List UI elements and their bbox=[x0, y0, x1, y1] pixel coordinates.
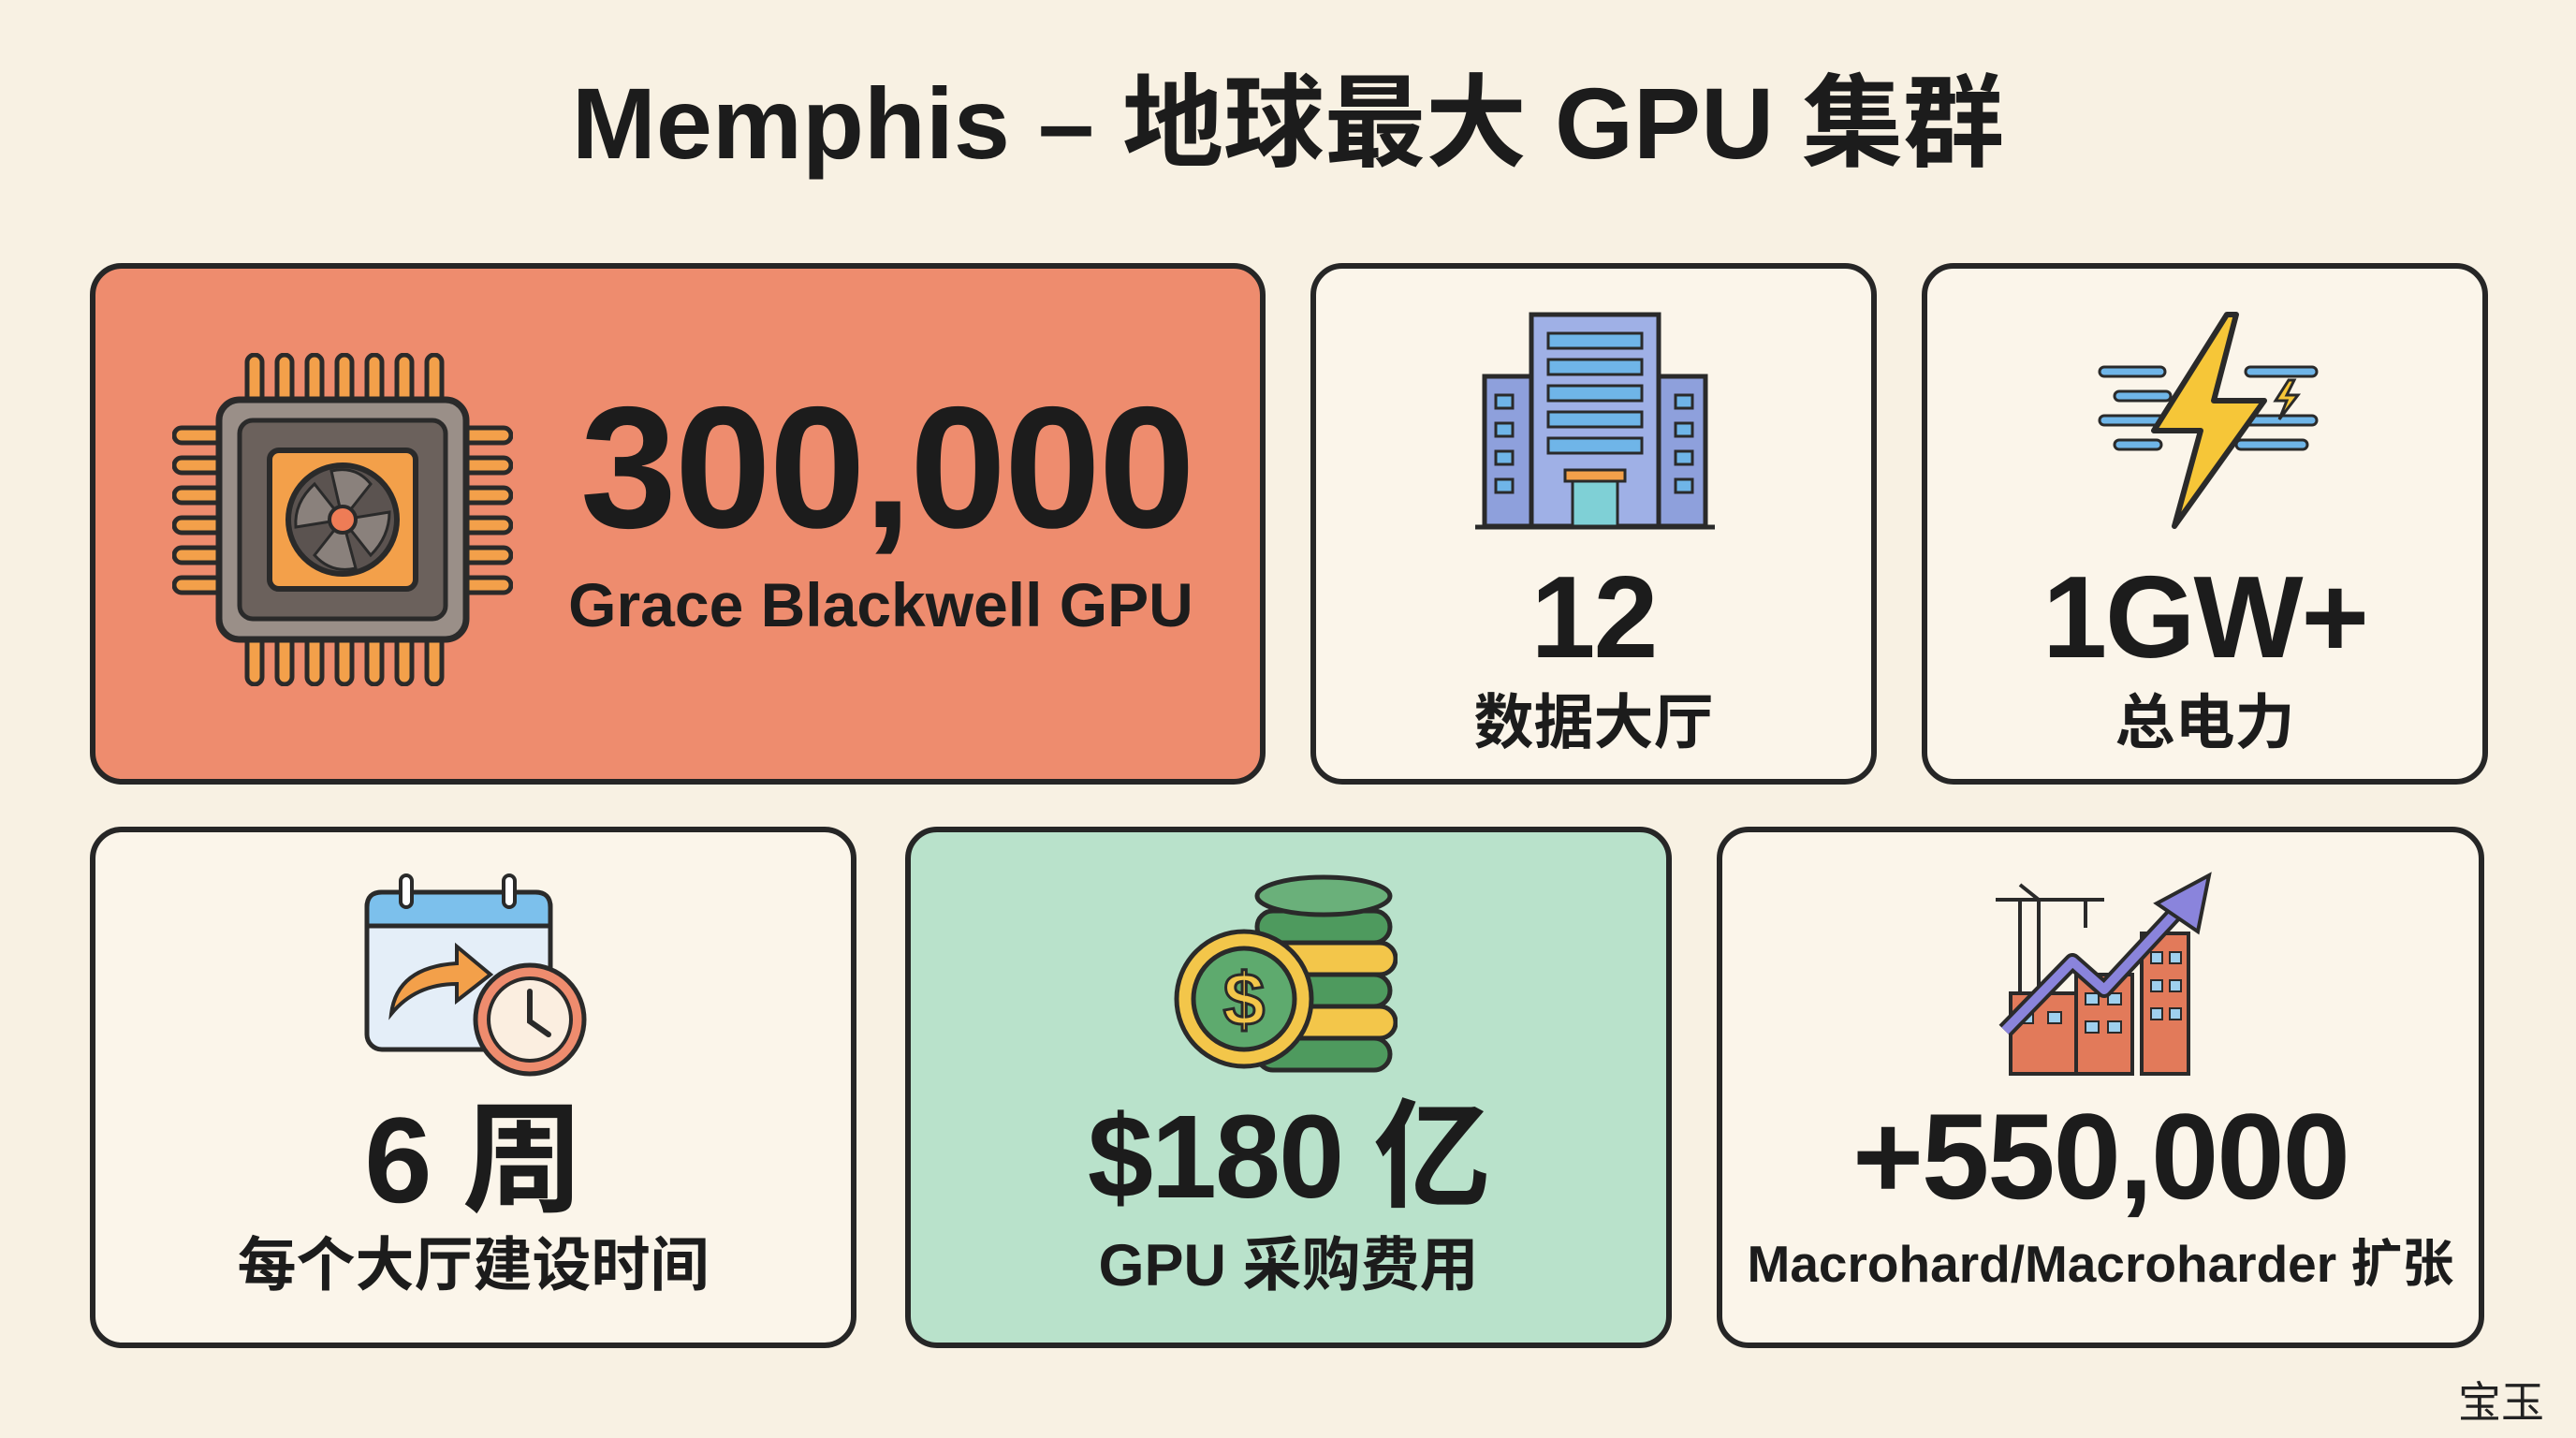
panel: build time bbox=[90, 827, 856, 1348]
icon: coins bbox=[1174, 874, 1398, 1073]
icon: coins: $ bbox=[1223, 958, 1265, 1041]
number: +550,000: +550,000 bbox=[1852, 1088, 2349, 1225]
panel: data halls bbox=[1310, 263, 1877, 785]
label: Macrohard/Macroharder 扩张: Macrohard/Macroharder 扩张 bbox=[1748, 1235, 2453, 1293]
number: 6 周: 6 周 bbox=[364, 1092, 582, 1228]
panel: cost bbox=[905, 827, 1672, 1348]
icon: construction growth bbox=[1996, 872, 2212, 1076]
watermark: 宝玉 bbox=[2458, 1378, 2544, 1427]
title: Memphis – 地球最大 GPU 集群 bbox=[572, 66, 2004, 180]
label: 数据大厅: 数据大厅 bbox=[1473, 689, 1713, 756]
icon: GPU chip bbox=[172, 353, 513, 686]
label: Grace Blackwell GPU: Grace Blackwell GPU bbox=[568, 570, 1193, 639]
label: 每个大厅建设时间: 每个大厅建设时间 bbox=[238, 1233, 710, 1299]
number: $180 亿: $180 亿 bbox=[1088, 1091, 1489, 1223]
icon: building bbox=[1475, 313, 1715, 530]
panel: GPU count bbox=[90, 263, 1266, 785]
icon: calendar clock bbox=[365, 873, 586, 1077]
label: 总电力: 总电力 bbox=[2115, 689, 2295, 756]
label: GPU 采购费用: GPU 采购费用 bbox=[1098, 1233, 1479, 1299]
number: 12: 12 bbox=[1531, 553, 1656, 682]
panel: expansion bbox=[1717, 827, 2484, 1348]
number: 300,000: 300,000 bbox=[580, 372, 1193, 565]
panel: power bbox=[1922, 263, 2488, 785]
icon: lightning bbox=[2099, 312, 2318, 529]
number: 1GW+: 1GW+ bbox=[2042, 553, 2367, 682]
